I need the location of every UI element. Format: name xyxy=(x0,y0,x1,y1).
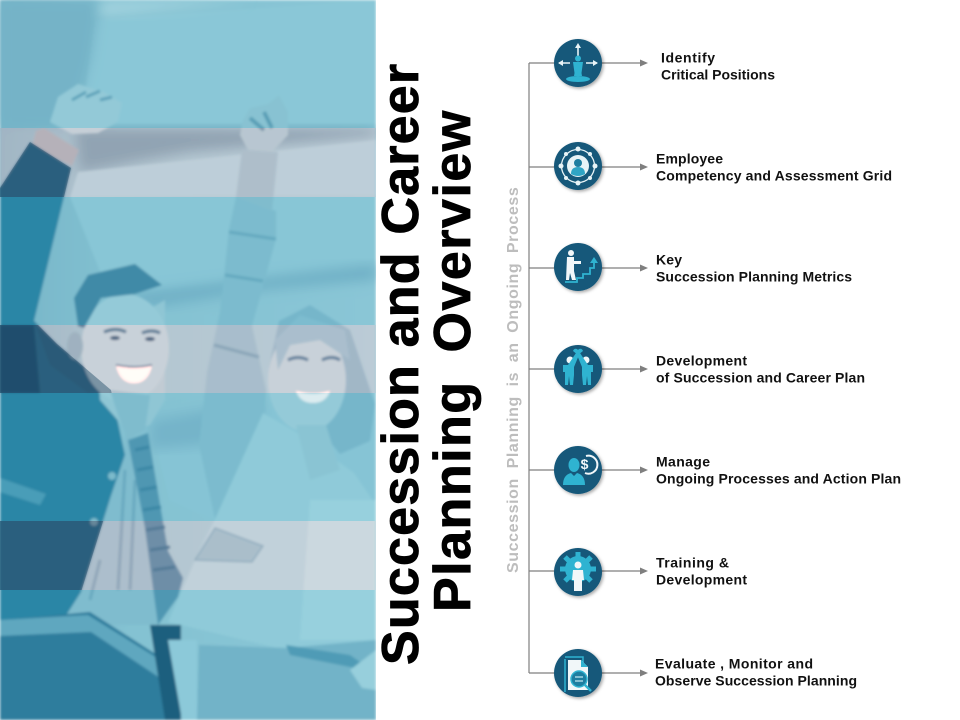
title: Succession and Career xyxy=(372,63,430,665)
connector lines and arrows xyxy=(529,60,648,676)
label: employee competency grid: Employee xyxy=(656,150,723,166)
title: Planning Overview xyxy=(424,109,482,612)
label: development of succession and career plan: of Succession and Career Plan xyxy=(656,370,865,386)
icon: manager with dollar coin xyxy=(554,446,602,494)
label: key succession planning metrics: Succession Planning Metrics xyxy=(656,268,852,284)
label: key succession planning metrics: Key xyxy=(656,252,682,268)
label: training and development: Training & xyxy=(656,554,729,570)
label: training and development xyxy=(656,554,747,588)
label: evaluate monitor and observe: Observe Succession Planning xyxy=(655,672,857,688)
label: training and development: Development xyxy=(656,572,747,588)
label: employee competency grid: Competency and Assessment Grid xyxy=(656,168,892,184)
icon: person with four arrows xyxy=(554,39,602,87)
vertical caption: Succession Planning is an Ongoing Process xyxy=(505,187,522,573)
label: key succession planning metrics xyxy=(656,252,852,284)
label: identify critical positions xyxy=(661,50,775,82)
icon: person in gear xyxy=(554,548,602,596)
label: evaluate monitor and observe: Evaluate , Monitor and xyxy=(655,656,813,672)
label: manage ongoing processes and action plan xyxy=(656,454,901,486)
icon: person climbing stairs xyxy=(554,243,602,291)
title xyxy=(372,63,482,665)
panel: photo of two cheering colleagues with tinted bands xyxy=(0,0,376,720)
label: evaluate monitor and observe xyxy=(655,656,857,688)
label: employee competency grid xyxy=(656,150,892,184)
label: manage ongoing processes and action plan: Manage xyxy=(656,454,710,470)
icon: manager with dollar coin: $ xyxy=(581,456,589,472)
label: identify critical positions: Identify xyxy=(661,50,715,66)
label: identify critical positions: Critical Positions xyxy=(661,66,775,82)
label: manage ongoing processes and action plan: Ongoing Processes and Action Plan xyxy=(656,470,901,486)
icon: two people with heart xyxy=(554,345,602,393)
label: development of succession and career plan: Development xyxy=(656,352,747,368)
icon: document with magnifier xyxy=(554,649,602,697)
icon: person in ring of nodes xyxy=(554,142,602,190)
label: development of succession and career plan xyxy=(656,352,865,386)
